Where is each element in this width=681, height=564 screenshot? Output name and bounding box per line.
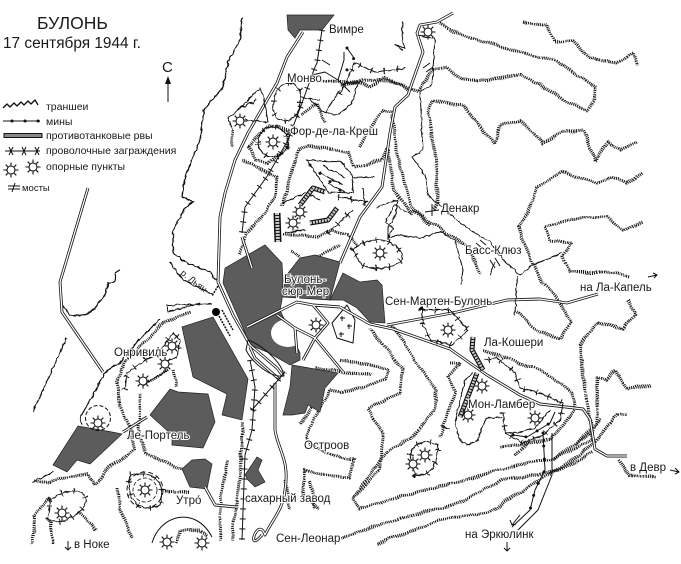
place names: Остроов xyxy=(304,440,349,452)
place names: Ла-Кошери xyxy=(484,337,543,349)
place names: Онривиль xyxy=(114,347,167,359)
roads xyxy=(60,13,627,541)
place names: Сен-Мартен-Булонь xyxy=(385,296,492,308)
coastline xyxy=(33,18,242,482)
strongpoints xyxy=(54,24,542,550)
legend: опорные пункты xyxy=(46,161,125,173)
place names: Басс-Клюз xyxy=(465,245,522,257)
title: 17 сентября 1944 г. xyxy=(3,35,141,52)
central town white block xyxy=(271,302,355,353)
place names: Денакр xyxy=(441,203,479,215)
barbed wire xyxy=(48,63,563,522)
north arrow xyxy=(162,59,173,102)
place names: на Эркюлинк xyxy=(465,529,534,541)
north arrow: С xyxy=(162,59,173,76)
legend: мины xyxy=(46,116,72,128)
trenches xyxy=(143,88,550,433)
place names: Утро́ xyxy=(176,495,201,507)
place names: р. Льян xyxy=(179,268,209,294)
legend xyxy=(3,100,176,194)
place names: в Девр xyxy=(630,462,666,474)
place names: в Ноке xyxy=(74,539,110,551)
place names: Фор-де-ла-Креш xyxy=(290,126,378,138)
bridges xyxy=(423,63,500,268)
minefields xyxy=(310,48,555,530)
legend: мосты xyxy=(22,183,50,194)
city districts xyxy=(53,15,385,489)
title xyxy=(3,13,141,52)
place names: на Ла-Капель xyxy=(580,282,652,294)
anti-tank ditches xyxy=(277,188,483,417)
place names: Монво xyxy=(287,73,322,85)
railway xyxy=(242,30,322,540)
legend: проволочные заграждения xyxy=(46,145,176,157)
rivers and streams xyxy=(385,22,562,315)
place names: сахарный завод xyxy=(245,493,331,505)
place names: Булонь- xyxy=(284,274,326,286)
place names: Мон-Ламбер xyxy=(468,399,535,411)
direction arrows xyxy=(65,273,679,551)
legend: траншеи xyxy=(46,101,89,113)
place names: Сен-Леонар xyxy=(276,533,340,545)
place names: Вимре xyxy=(329,24,364,36)
place names: Ле-Портель xyxy=(127,430,189,442)
legend: противотанковые рвы xyxy=(46,130,153,142)
place names: сюр-Мер xyxy=(282,286,329,298)
title: БУЛОНЬ xyxy=(37,13,108,33)
fort blockhouse xyxy=(212,308,220,316)
